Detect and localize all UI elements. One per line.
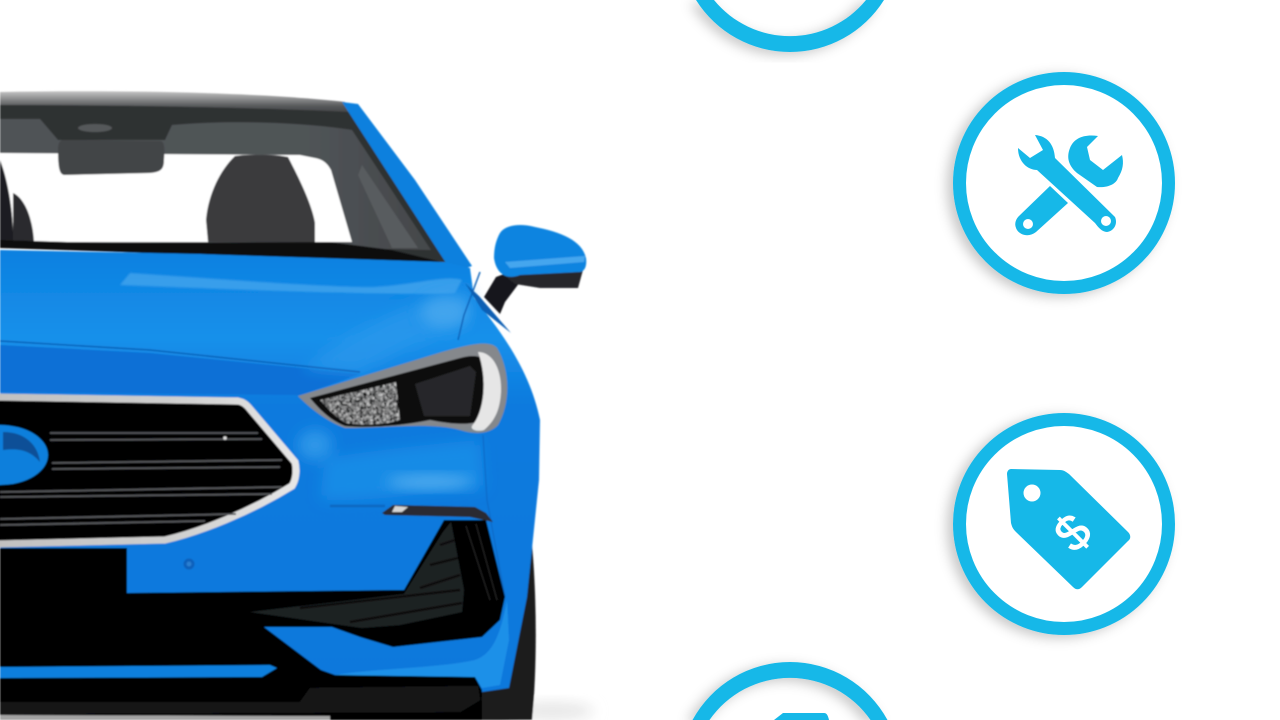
side mirror	[484, 225, 586, 314]
tag	[1007, 469, 1130, 589]
icon: price tag	[960, 420, 1168, 628]
roof	[0, 91, 352, 116]
lip highlight	[335, 600, 509, 688]
icon: tools	[960, 78, 1168, 288]
grille logo	[0, 425, 48, 485]
grille	[0, 397, 296, 544]
cropped glyph	[774, 713, 829, 720]
interior mirror	[58, 140, 164, 175]
bumper highlights	[184, 429, 505, 597]
lower air intake	[0, 520, 505, 720]
ring	[960, 78, 1168, 288]
honeycomb mesh	[250, 522, 497, 628]
bottom trim	[0, 715, 330, 720]
A-pillar	[342, 102, 472, 272]
hood details	[0, 272, 511, 395]
ring	[960, 420, 1168, 628]
fog lamp trim	[382, 505, 493, 522]
windshield	[0, 105, 452, 268]
tag hole	[1024, 484, 1040, 502]
splitter	[0, 686, 480, 714]
rear window opening	[0, 153, 352, 242]
front tyre	[470, 545, 536, 720]
icon: bottom circle (cropped)	[692, 662, 888, 720]
left seat	[0, 160, 13, 245]
car	[0, 91, 594, 720]
front seat	[206, 155, 315, 242]
dollar sign: $	[1043, 503, 1102, 562]
lower lip strip	[0, 665, 277, 678]
crossed wrench	[1015, 135, 1123, 235]
icon: top circle (cropped)	[696, 0, 884, 52]
headlight	[298, 344, 507, 433]
dashboard	[0, 240, 446, 263]
body shell	[0, 250, 540, 692]
ground shadow	[510, 703, 594, 719]
